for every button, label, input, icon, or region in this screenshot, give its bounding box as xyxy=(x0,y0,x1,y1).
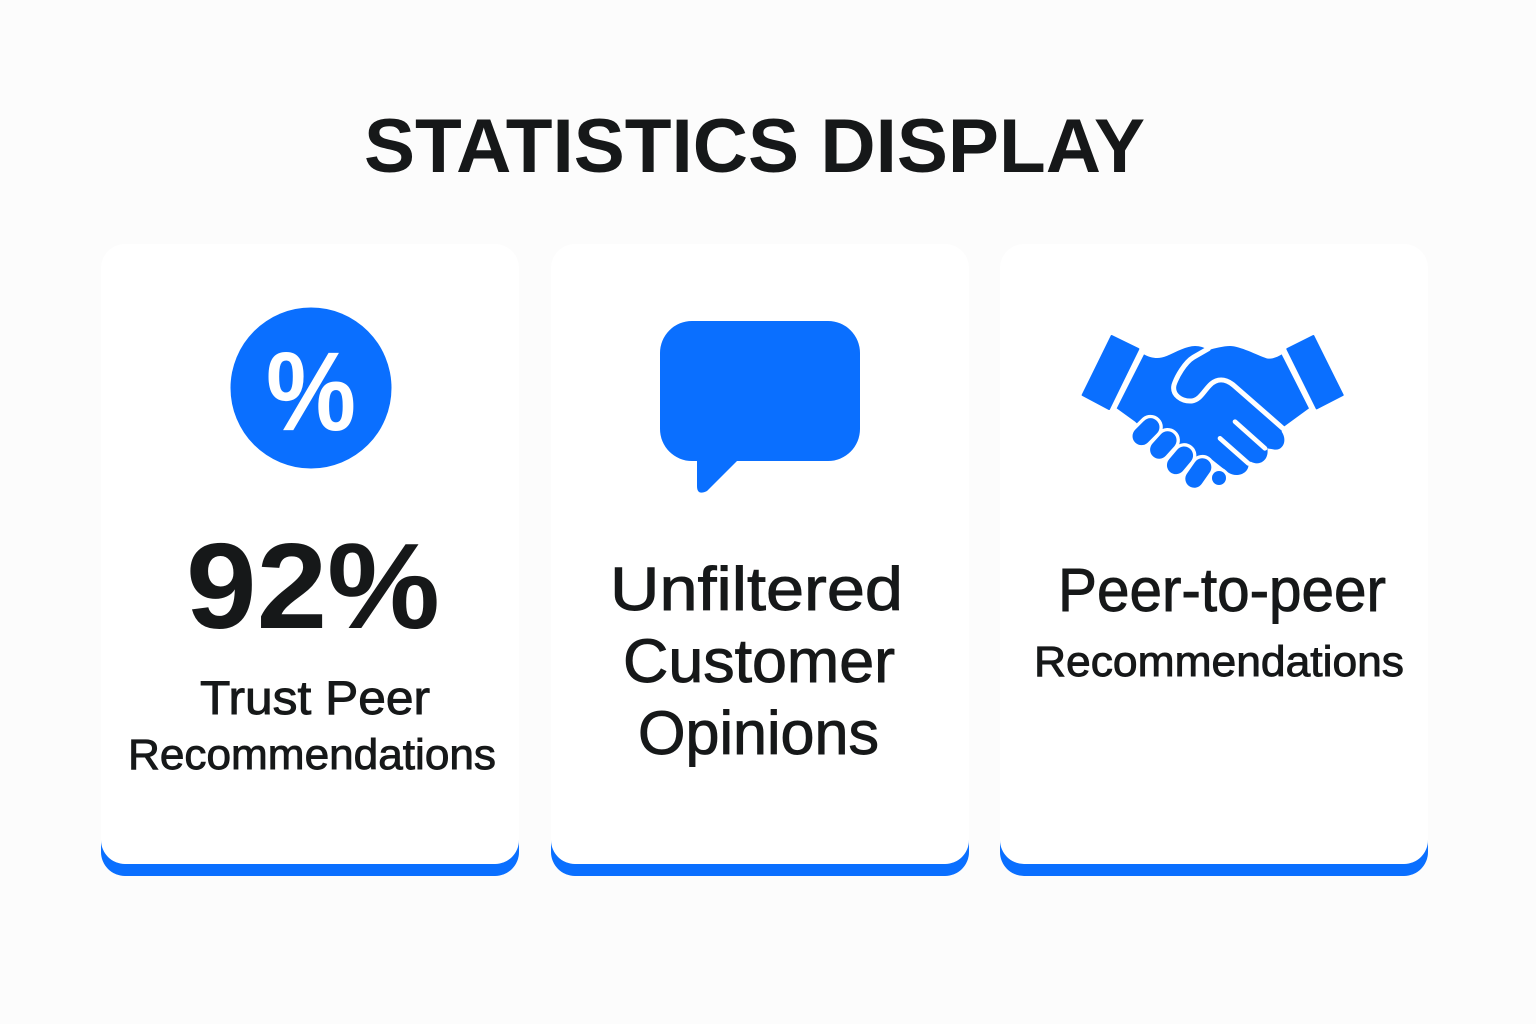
icon: handshake xyxy=(1083,336,1343,491)
icon: speech bubble xyxy=(660,321,860,493)
card 3 white face xyxy=(1000,244,1428,864)
icon: percent circle: % xyxy=(266,329,356,454)
icon: percent circle xyxy=(230,308,392,468)
card 1 blue base xyxy=(101,700,519,876)
label: recommendations: Recommendations xyxy=(1034,638,1404,686)
heading: unfiltered: Unfiltered xyxy=(610,555,903,623)
card 2 blue base xyxy=(551,700,969,876)
panel: peer-to-peer recommendations xyxy=(1000,244,1428,876)
label: recommendations: Recommendations xyxy=(128,731,496,779)
heading: opinions: Opinions xyxy=(638,699,879,767)
title: STATISTICS DISPLAY xyxy=(364,104,1145,189)
panel: unfiltered customer opinions xyxy=(551,244,969,876)
card 3 blue base xyxy=(1000,700,1428,876)
label: trust peer: Trust Peer xyxy=(200,671,430,724)
card 1 white face xyxy=(101,244,519,864)
statistic: 92%: 92% xyxy=(186,518,440,654)
heading: customer: Customer xyxy=(623,627,895,695)
card 2 white face xyxy=(551,244,969,864)
heading: peer-to-peer: Peer-to-peer xyxy=(1058,556,1386,624)
panel: 92% trust peer recommendations xyxy=(101,244,519,876)
